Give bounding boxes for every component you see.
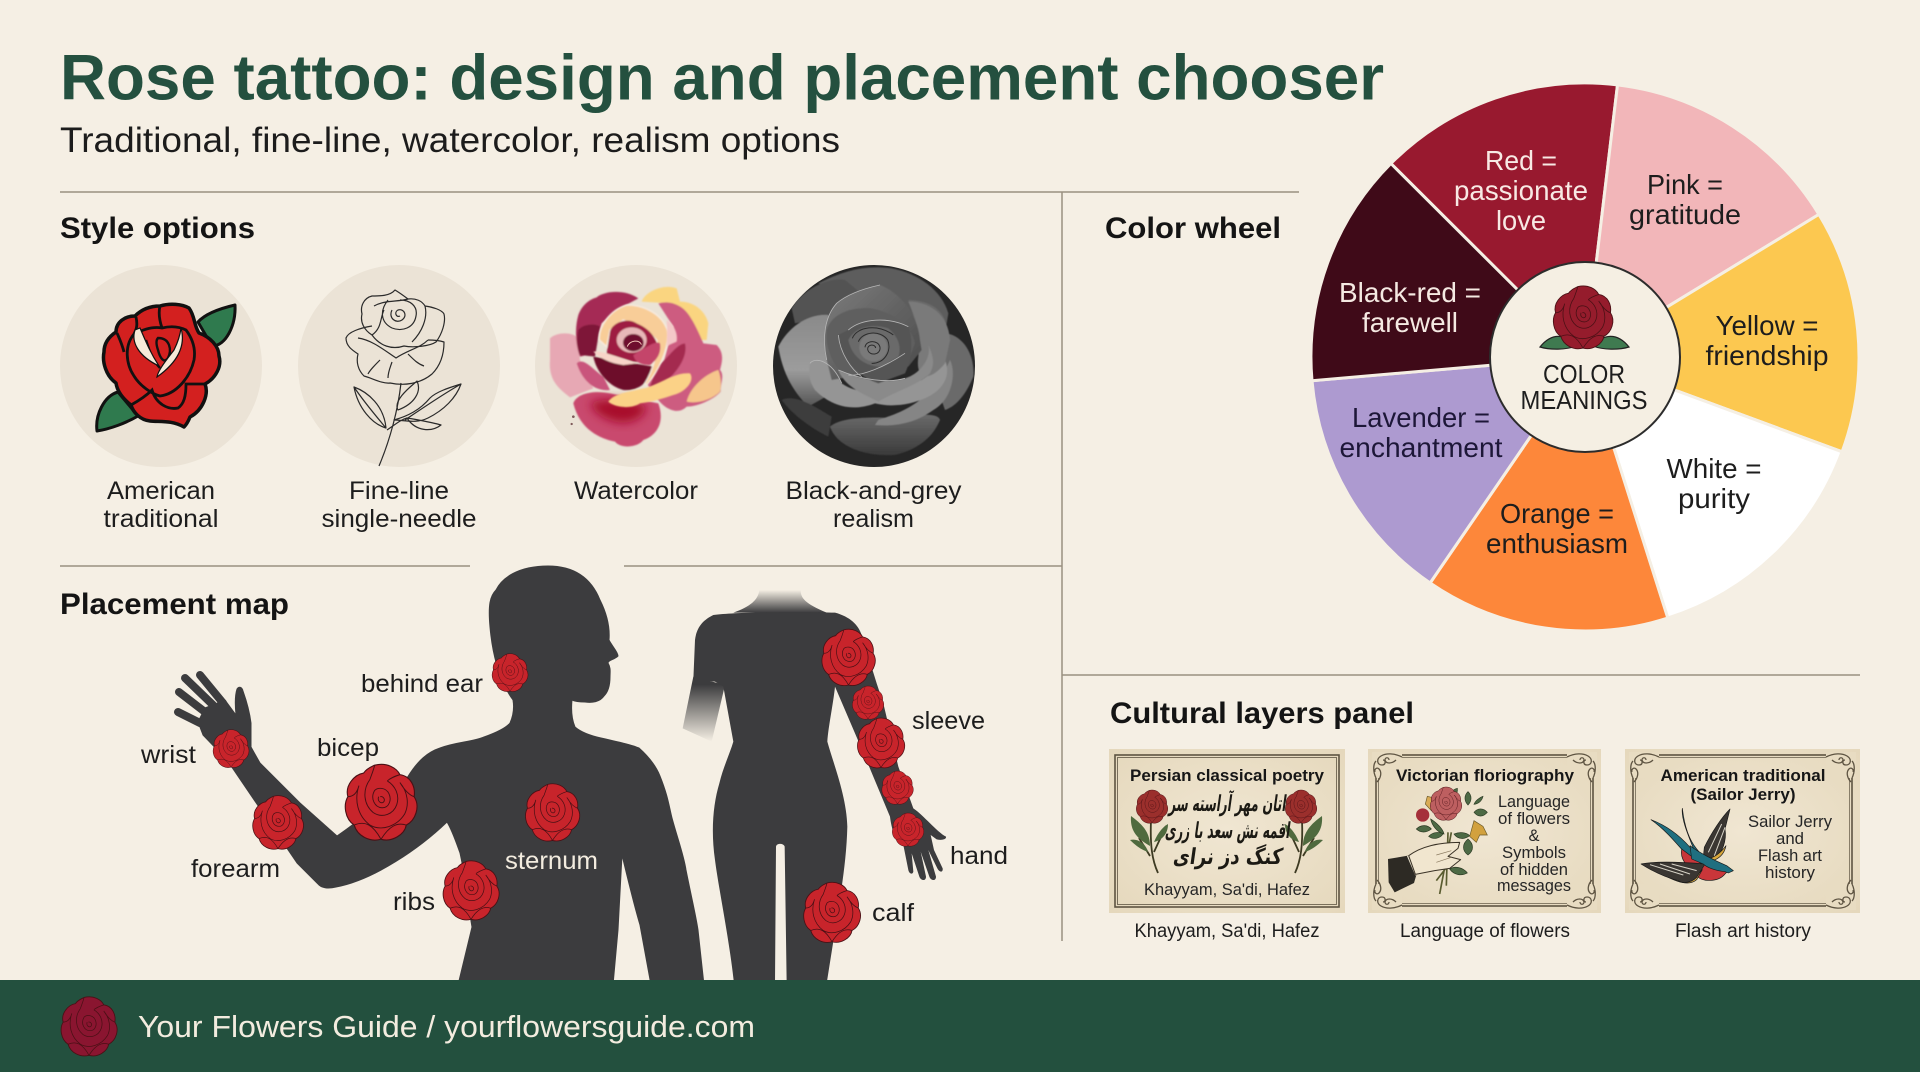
wedge: lavender (1312, 357, 1585, 583)
label: calf: calf (872, 899, 914, 927)
label: American traditional: traditional (104, 505, 218, 533)
label: fine-line single-needle: single-needle (322, 505, 476, 533)
hub: color meanings: MEANINGS (1520, 387, 1648, 415)
label: fine-line single-needle: Fine-line (349, 477, 449, 505)
card: Victorian floriography: & (1528, 827, 1540, 845)
label: lavender (1340, 402, 1503, 463)
wedge: white (1585, 357, 1842, 618)
wedge: black-red (1311, 164, 1585, 381)
label: black-red (1339, 277, 1481, 338)
label: yellow: Yellow = (1716, 310, 1818, 341)
icon: watercolor rose (535, 265, 737, 467)
card: American traditional: Flash art (1758, 847, 1822, 865)
label: black-red: farewell (1362, 307, 1458, 338)
label: orange (1486, 498, 1628, 559)
heading: color wheel: Color wheel (1105, 212, 1281, 245)
label: behind ear: behind ear (361, 670, 483, 698)
heading: placement map: Placement map (60, 588, 289, 621)
wedge: red (1391, 83, 1618, 357)
label: pink: gratitude (1629, 199, 1741, 230)
label: American traditional: American (107, 477, 215, 505)
label: orange: Orange = (1500, 498, 1614, 529)
rose: ribs (443, 861, 499, 920)
icon: black-and-grey realism rose (773, 265, 975, 467)
chart: color wheel (1311, 83, 1859, 631)
caption: Flash art history: Flash art history (1675, 921, 1811, 942)
card: American traditional: (Sailor Jerry) (1690, 785, 1796, 804)
label: American traditional (104, 477, 218, 533)
rose: calf (804, 882, 861, 942)
label: pink: Pink = (1647, 169, 1723, 200)
card: American traditional (1625, 749, 1860, 913)
rose: bicep (345, 764, 417, 840)
rose: wrist (213, 730, 249, 768)
label: orange: enthusiasm (1486, 528, 1628, 559)
label: lavender: enchantment (1340, 432, 1503, 463)
label: yellow: friendship (1706, 340, 1828, 371)
rose: sleeve upper (822, 629, 875, 686)
hub: color meanings: COLOR (1543, 361, 1625, 389)
label: red (1454, 145, 1588, 236)
label: black-and-grey realism (786, 477, 962, 533)
card: Persian classical poetry (1109, 749, 1345, 913)
card: Persian classical poetry: اتان مهر آراسته سر (1167, 789, 1289, 817)
panel: cultural layers (1109, 697, 1860, 942)
rose: hand (892, 813, 924, 846)
label: ribs: ribs (393, 888, 435, 916)
card: Persian classical poetry: کنگ دز نرای (1172, 843, 1285, 869)
hub: color meanings (1490, 262, 1680, 452)
label: fine-line single-needle (322, 477, 476, 533)
card: Victorian floriography: Victorian floriography (1396, 766, 1575, 785)
label: black-red: Black-red = (1339, 277, 1481, 308)
icon: fine-line rose (298, 265, 500, 467)
label: white: purity (1678, 483, 1750, 514)
rose: sleeve second (852, 686, 884, 719)
rose: behind ear (492, 654, 528, 692)
heading: cultural layers panel: Cultural layers panel (1110, 697, 1414, 730)
label: watercolor: Watercolor (574, 477, 698, 505)
card: American traditional: history (1765, 864, 1816, 882)
heading: style options: Style options (60, 212, 255, 245)
label: bicep: bicep (317, 734, 379, 762)
label: lavender: Lavender = (1352, 402, 1490, 433)
label: pink (1629, 169, 1741, 230)
rose: sleeve fourth (882, 771, 913, 804)
panel: placement map (60, 566, 1008, 985)
card: American traditional: American traditional (1660, 766, 1826, 785)
label: black-and-grey realism: realism (833, 505, 914, 533)
label: red: Red = (1485, 145, 1557, 176)
rose: sleeve third (857, 718, 905, 768)
label: red: love (1496, 205, 1546, 236)
label: sternum: sternum (505, 847, 598, 875)
icon: American traditional rose (60, 265, 262, 467)
label: forearm: forearm (191, 855, 280, 883)
label: black-and-grey realism: Black-and-grey (786, 477, 962, 505)
wedge: yellow (1585, 214, 1859, 452)
footer (0, 980, 1920, 1072)
card: Victorian floriography: messages (1497, 877, 1571, 895)
panel: style options (60, 212, 975, 533)
icon: footer rose (61, 997, 117, 1056)
silhouette: back figure (683, 590, 946, 983)
card: Persian classical poetry: Persian classical poetry (1130, 766, 1325, 785)
wedge: orange (1430, 357, 1668, 631)
label: wrist: wrist (140, 741, 196, 769)
card: Persian classical poetry: Khayyam, Sa'di, Hafez (1144, 881, 1310, 899)
card: Victorian floriography: Symbols (1502, 844, 1566, 862)
card: Victorian floriography (1368, 749, 1601, 913)
label: white (1666, 453, 1762, 514)
label: yellow (1706, 310, 1828, 371)
card: Victorian floriography: of hidden (1500, 861, 1568, 879)
rose: sternum (526, 784, 580, 841)
rose: forearm (253, 796, 303, 849)
wedge: pink (1585, 85, 1819, 357)
card: American traditional: Sailor Jerry (1748, 813, 1833, 831)
subtitle: Traditional, fine-line, watercolor, realism options (60, 121, 840, 160)
silhouette: front figure (178, 566, 704, 985)
title: Rose tattoo: design and placement chooser (60, 42, 1384, 114)
card: Victorian floriography: Language (1498, 793, 1570, 811)
card: Victorian floriography: of flowers (1498, 810, 1570, 828)
label: red: passionate (1454, 175, 1588, 206)
label: white: White = (1666, 453, 1762, 484)
caption: Language of flowers: Language of flowers (1400, 921, 1570, 942)
label: hand: hand (950, 842, 1008, 870)
caption: Khayyam, Sa'di, Hafez: Khayyam, Sa'di, Hafez (1134, 921, 1320, 942)
footer text: Your Flowers Guide / yourflowersguide.com (138, 1009, 755, 1044)
card: Persian classical poetry: اقمه نش سعد با زری (1164, 818, 1292, 844)
card: American traditional: and (1776, 830, 1804, 848)
label: sleeve: sleeve (912, 707, 985, 735)
